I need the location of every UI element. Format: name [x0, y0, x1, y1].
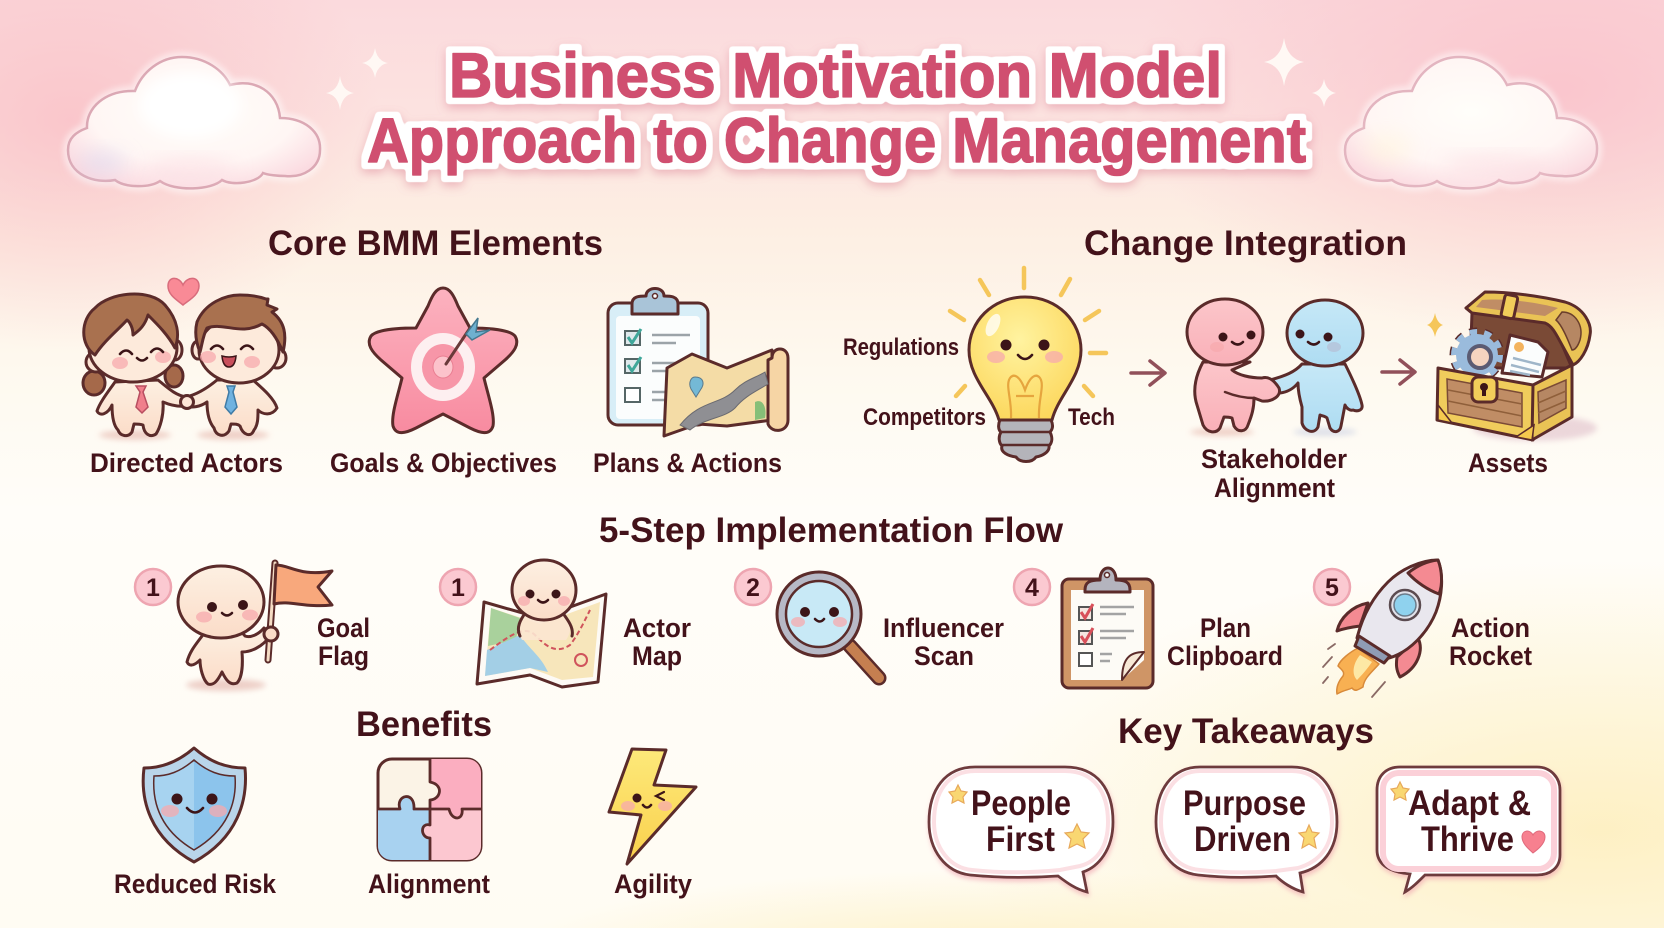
label: plans and actions: Plans & Actions: [593, 448, 782, 478]
label: competitors: Competitors: [863, 404, 986, 431]
step badge 2: [735, 569, 771, 605]
icon: puzzle: [378, 759, 481, 860]
label: goal flag: [317, 613, 370, 671]
callout: adapt and thrive: Adapt &: [1408, 784, 1531, 823]
label: alignment: Alignment: [368, 869, 490, 899]
panel: key takeaways: [929, 712, 1560, 892]
step badge 5: 5: [1325, 574, 1339, 602]
heading: core BMM elements: Core BMM Elements: [268, 224, 603, 263]
step badge 4: 4: [1025, 574, 1039, 602]
sparkles: [326, 38, 1336, 110]
icon: plan clipboard: [1062, 568, 1153, 688]
cloud right: [1345, 57, 1597, 188]
label: goal flag: Goal: [317, 613, 370, 643]
icon: actor map: [477, 560, 606, 687]
label: tech: Tech: [1068, 404, 1115, 431]
icon: goal flag person: [178, 563, 332, 691]
label: actor map: Map: [632, 641, 682, 671]
label: action rocket: Rocket: [1449, 641, 1532, 671]
label: actor map: [623, 613, 691, 671]
panel: core BMM elements: [83, 224, 788, 478]
arrow: [1131, 361, 1165, 385]
step badge 4: [1014, 569, 1050, 605]
icon: shield: [143, 748, 245, 862]
label: agility: Agility: [614, 869, 692, 899]
panel: 5-step implementation flow: [135, 511, 1532, 697]
heading: benefits: Benefits: [356, 705, 492, 744]
label: influencer scan: Influencer: [883, 613, 1004, 643]
icon: directed actors: [83, 278, 286, 440]
label: reduced risk: Reduced Risk: [114, 869, 277, 899]
label: actor map: Actor: [623, 613, 691, 643]
label: action rocket: Action: [1451, 613, 1530, 643]
callout: adapt and thrive: Thrive: [1421, 820, 1514, 859]
step badge 5: [1314, 569, 1350, 605]
label: directed actors: Directed Actors: [90, 448, 283, 478]
callout: people first: People: [971, 784, 1071, 823]
title: Business Motivation Model: [449, 41, 1222, 111]
icon: treasure chest: [1427, 292, 1597, 441]
step badge 1: [440, 569, 476, 605]
label: plan clipboard: Plan: [1200, 613, 1251, 643]
label: stakeholder alignment: Alignment: [1214, 473, 1335, 503]
label: influencer scan: Scan: [914, 641, 974, 671]
label: goal flag: Flag: [318, 641, 369, 671]
step badge 1: 1: [146, 574, 160, 602]
icon: rocket: [1323, 560, 1442, 697]
panel: change integration: [843, 224, 1597, 503]
label: influencer scan: [883, 613, 1004, 671]
arrow: [1382, 360, 1415, 384]
step badge 1: [135, 569, 171, 605]
title: [367, 41, 1306, 176]
title: Approach to Change Management: [367, 106, 1306, 176]
icon: light bulb: [950, 268, 1106, 462]
heading: key takeaways: Key Takeaways: [1118, 712, 1374, 751]
callout: purpose driven: Driven: [1194, 820, 1291, 859]
label: goals and objectives: Goals & Objectives: [330, 448, 557, 478]
cloud left: [68, 57, 320, 188]
icon: lightning bolt: [609, 749, 696, 864]
icon: clipboard and map: [608, 288, 788, 436]
step badge 2: 2: [746, 574, 760, 602]
panel: benefits: [114, 705, 696, 899]
icon: magnifying glass: [777, 572, 879, 678]
callout: adapt and thrive: [1377, 767, 1560, 892]
callout: purpose driven: Purpose: [1183, 784, 1306, 823]
label: action rocket: [1449, 613, 1532, 671]
icon: stakeholder handshake: [1187, 299, 1363, 436]
label: regulations: Regulations: [843, 334, 959, 361]
heading: change integration: Change Integration: [1084, 224, 1407, 263]
callout: purpose driven: [1156, 767, 1337, 892]
label: stakeholder alignment: [1201, 444, 1347, 503]
icon: star with target: [369, 288, 517, 433]
label: plan clipboard: Clipboard: [1167, 641, 1283, 671]
label: stakeholder alignment: Stakeholder: [1201, 444, 1347, 474]
label: plan clipboard: [1167, 613, 1283, 671]
callout: people first: First: [986, 820, 1055, 859]
step badge 1: 1: [451, 574, 465, 602]
label: assets: Assets: [1468, 448, 1548, 478]
callout: people first: [929, 767, 1113, 892]
heading: 5-step flow: 5-Step Implementation Flow: [599, 511, 1064, 550]
